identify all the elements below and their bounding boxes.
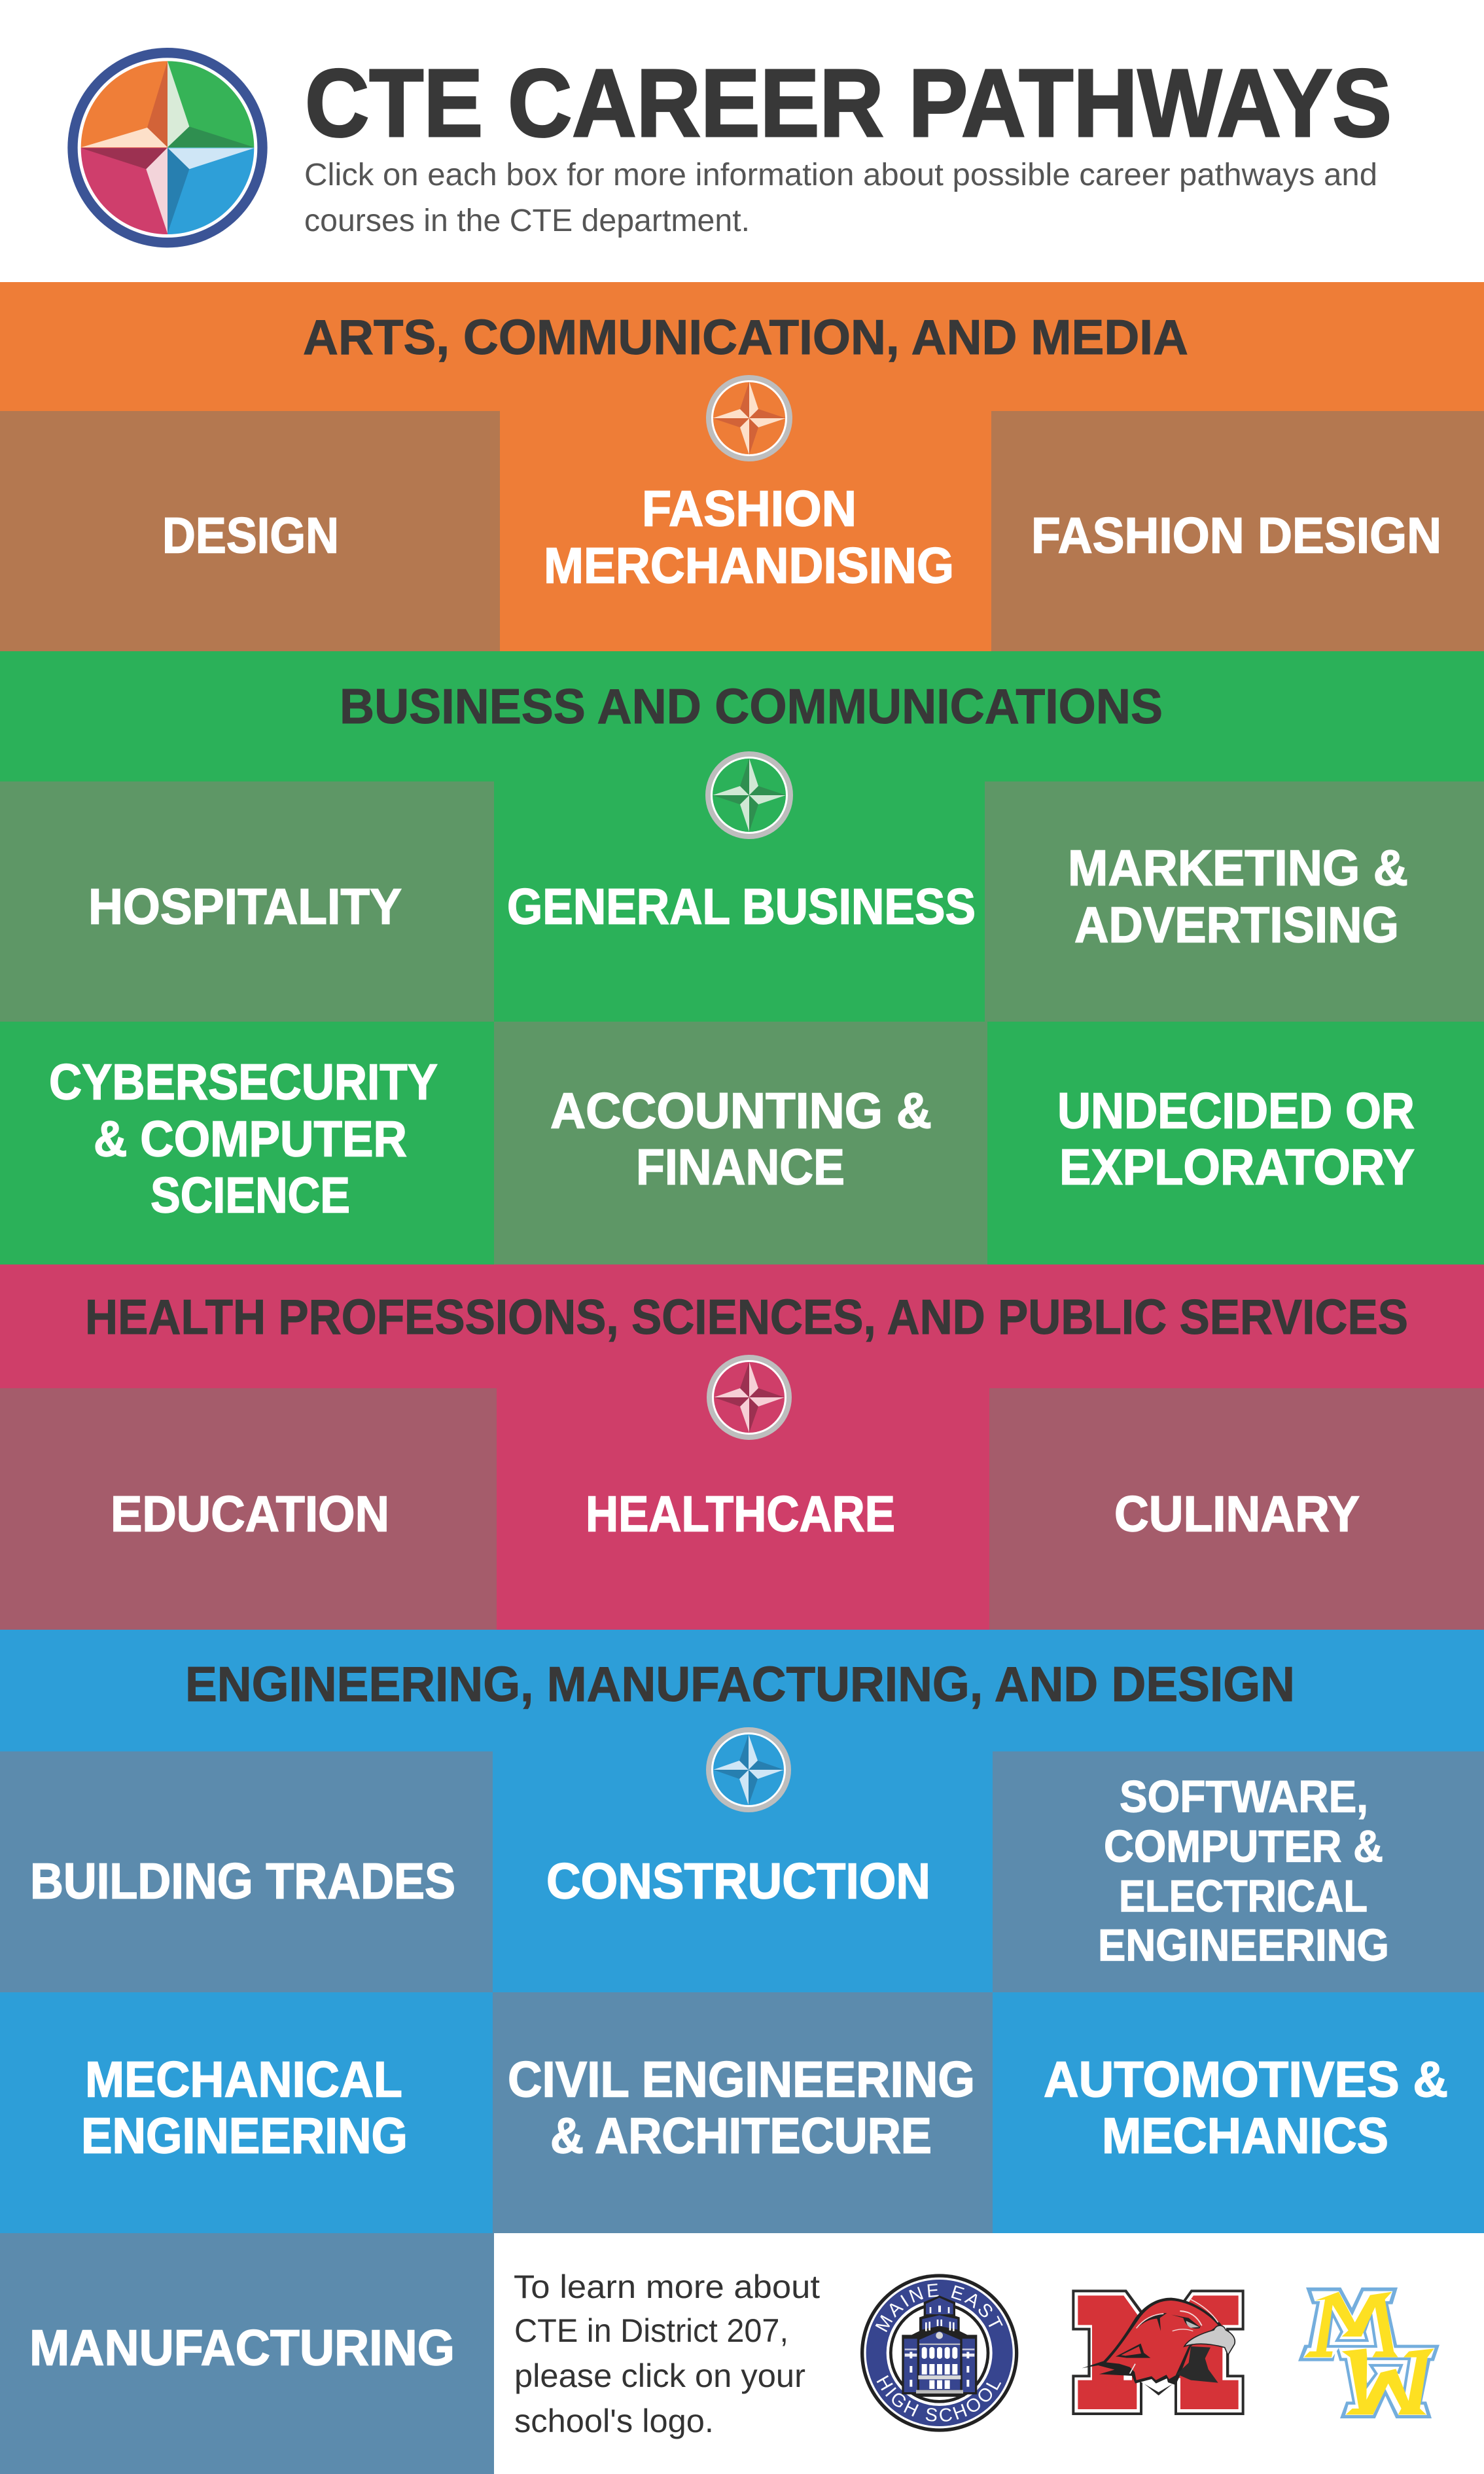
box: building trades [0,1751,493,1992]
box: civil engineering and architecure: CIVIL ENGINEERING [508,2051,975,2107]
icon: compass logo [67,48,268,247]
box: fashion merchandising: MERCHANDISING [544,538,954,594]
box: marketing and advertising: MARKETING & [1068,840,1408,897]
panel: engineering, manufacturing, and design [0,1630,1484,2474]
box: software, computer and electrical engineering [993,1751,1484,1992]
icon: blue compass [706,1727,791,1812]
box: accounting and finance: ACCOUNTING & [550,1083,932,1139]
box: civil engineering and architecure [493,1992,993,2233]
text: learn more: school's logo. [514,2403,714,2439]
box: automotives and mechanics: MECHANICS [1102,2107,1388,2164]
heading: arts: ARTS, COMMUNICATION, AND MEDIA [303,310,1188,365]
panel: school logos [494,2233,1484,2474]
box: culinary [989,1388,1484,1630]
box: fashion design [991,411,1484,651]
box: accounting and finance [494,1022,987,1264]
panel: business and communications [0,651,1484,1264]
icon: red hawk M logo [1072,2289,1245,2415]
box: accounting and finance: FINANCE [636,1139,845,1195]
subtitle: Click on each box for more information about possible career pathways and [304,158,1377,192]
panel: arts, communication, and media [0,282,1484,651]
box: marketing and advertising [985,781,1484,1022]
text: learn more: CTE in District 207, [514,2312,788,2349]
icon: Maine East High School logo: HIGH SCHOOL [877,2375,1001,2422]
box: fashion merchandising [500,411,991,651]
box: cybersecurity and computer science [0,1022,494,1264]
box: undecided or exploratory: EXPLORATORY [1059,1139,1415,1195]
icon: Maine East High School logo [860,2274,1018,2432]
header [67,48,1392,247]
box: culinary: CULINARY [1114,1486,1360,1542]
box: manufacturing [0,2233,494,2474]
box: building trades: BUILDING TRADES [30,1854,455,1910]
box: automotives and mechanics: AUTOMOTIVES & [1044,2051,1448,2107]
box: cybersecurity and computer science: CYBERSECURITY [49,1054,438,1110]
box: software, computer and electrical engineering: ENGINEERING [1098,1920,1389,1970]
box: mechanical engineering: ENGINEERING [81,2107,408,2164]
box: healthcare [497,1388,989,1630]
box: design: DESIGN [162,508,339,564]
box: software, computer and electrical engineering: COMPUTER & [1104,1821,1383,1872]
box: marketing and advertising: ADVERTISING [1074,897,1399,953]
icon: MW logo [1298,2287,1440,2418]
box: automotives and mechanics [993,1992,1484,2233]
box: general business: GENERAL BUSINESS [507,878,976,935]
subtitle: courses in the CTE department. [304,204,750,238]
icon: green compass [705,751,793,839]
icon: pink compass [707,1355,792,1440]
box: mechanical engineering [0,1992,493,2233]
text: learn more: To learn more about [514,2268,820,2305]
text: learn more [514,2268,820,2439]
heading: health: HEALTH PROFESSIONS, SCIENCES, AND PUBLIC SERVICES [85,1289,1408,1344]
box: design [0,411,500,651]
box: civil engineering and architecure: & ARCHITECURE [550,2107,932,2164]
box: hospitality: HOSPITALITY [88,878,402,935]
box: construction [493,1751,993,1992]
box: manufacturing: MANUFACTURING [29,2320,455,2376]
box: fashion design: FASHION DESIGN [1031,508,1441,564]
box: education: EDUCATION [111,1486,389,1542]
box: cybersecurity and computer science: & COMPUTER [94,1111,407,1168]
panel: health professions [0,1264,1484,1630]
box: education [0,1388,497,1630]
box: undecided or exploratory [987,1022,1484,1264]
box: general business [494,781,985,1022]
heading: engineering: ENGINEERING, MANUFACTURING, AND DESIGN [185,1657,1295,1712]
text: learn more: please click on your [514,2357,805,2394]
icon: orange compass [706,375,792,461]
subtitle [304,158,1377,238]
box: mechanical engineering: MECHANICAL [85,2051,402,2107]
box: software, computer and electrical engineering: SOFTWARE, [1120,1771,1368,1822]
box: healthcare: HEALTHCARE [586,1486,895,1542]
box: construction: CONSTRUCTION [546,1854,930,1910]
box: undecided or exploratory: UNDECIDED OR [1057,1083,1415,1139]
box: software, computer and electrical engineering: ELECTRICAL [1119,1871,1368,1922]
box: hospitality [0,781,494,1022]
box: cybersecurity and computer science: SCIENCE [150,1168,350,1224]
title: CTE CAREER PATHWAYS [305,50,1392,157]
heading: business: BUSINESS AND COMMUNICATIONS [340,679,1163,734]
icon: Maine East High School logo: MAINE EAST [875,2284,1003,2333]
box: fashion merchandising: FASHION [642,480,857,537]
